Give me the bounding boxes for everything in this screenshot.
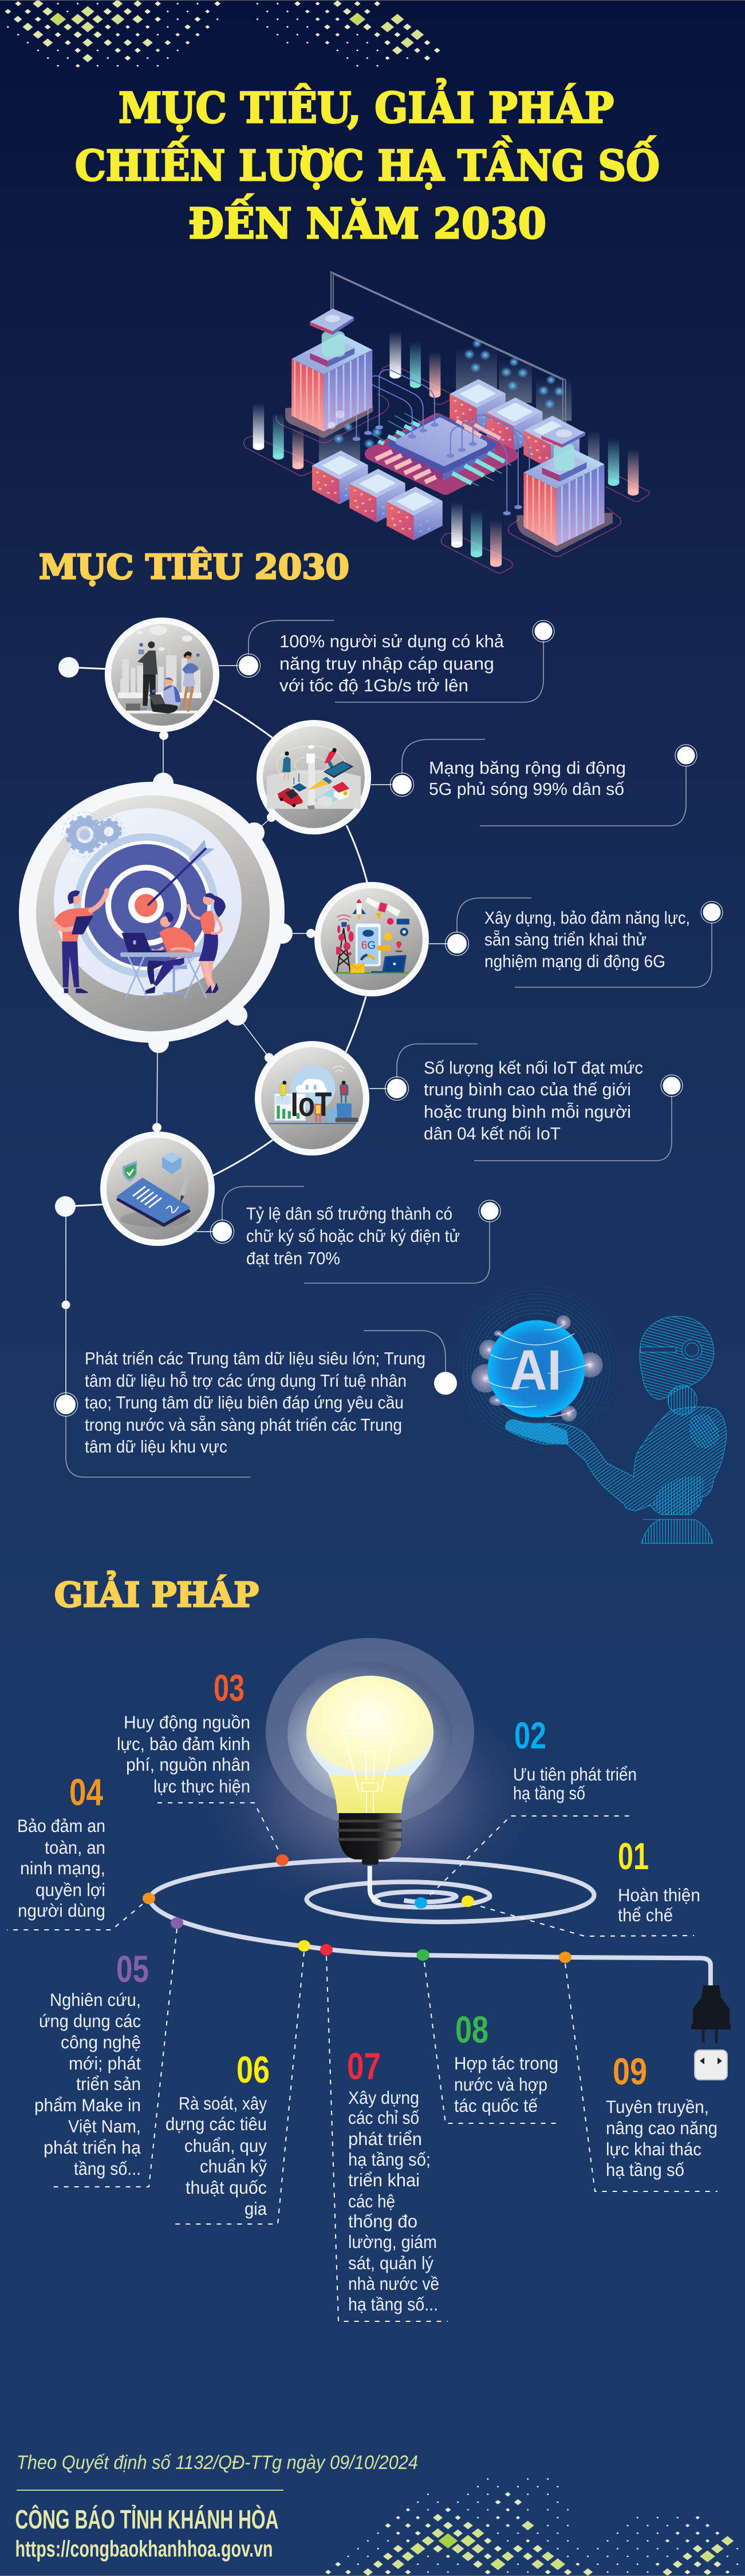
- small connector dots: [62, 731, 316, 1309]
- solution 05: 05: [116, 1948, 149, 1990]
- inner disc: [111, 624, 213, 726]
- text: dân 04 kết nối IoT: [424, 1123, 561, 1143]
- title: [75, 78, 660, 248]
- base plate outlines: [244, 365, 649, 573]
- solution dashed leaders: [7, 1803, 718, 2321]
- solution 08: nước và hợp: [454, 2074, 547, 2095]
- left cubes: [312, 450, 443, 540]
- solution 08: 08: [455, 2008, 488, 2051]
- standing woman: [188, 893, 226, 993]
- network connector lines: [65, 666, 447, 1396]
- circle 3: 6G: [314, 882, 429, 996]
- scene: [269, 1066, 358, 1123]
- text: đạt trên 70%: [246, 1248, 340, 1268]
- node left: [446, 932, 468, 956]
- callout 5: [211, 1186, 500, 1283]
- solution 05: ứng dụng các: [39, 2011, 141, 2031]
- circle 5: digital signature: [100, 1131, 215, 1246]
- solution 07: nhà nước về: [348, 2273, 439, 2294]
- socket: [338, 1813, 402, 1865]
- light beams: [253, 331, 638, 567]
- footer rule: [17, 2490, 283, 2491]
- glow puffs: [471, 1315, 603, 1422]
- glow: [198, 1638, 542, 1917]
- solution 04: người dùng: [18, 1900, 105, 1921]
- team figures: [54, 888, 226, 998]
- solution 09: nâng cao năng: [606, 2118, 718, 2138]
- outer white disc with knobs: [19, 773, 293, 1053]
- heading: mục tiêu 2030: MỤC TIÊU 2030: [39, 547, 349, 587]
- solution 07: hạ tầng số;: [348, 2149, 431, 2170]
- arrow: [148, 840, 215, 905]
- solution 05: tầng số...: [74, 2158, 141, 2179]
- solution 07: phát triển: [348, 2128, 422, 2149]
- title: CHIẾN LƯỢC HẠ TẦNG SỐ: [75, 136, 660, 191]
- target rings: [74, 833, 218, 978]
- panel: target illustration: [19, 773, 293, 1053]
- solution 07: hạ tầng số...: [348, 2294, 438, 2314]
- small dot left 2: [55, 1196, 76, 1217]
- text: [279, 631, 504, 695]
- text: Xây dựng, bảo đảm năng lực,: [484, 908, 690, 928]
- solution 09: Tuyên truyền,: [606, 2096, 709, 2117]
- node left: [54, 1393, 78, 1416]
- solution 05: Việt Nam,: [68, 2116, 141, 2136]
- solution 07: thống đo: [348, 2211, 417, 2231]
- solution 05: [34, 1948, 149, 2179]
- text: trong nước và sẵn sàng phát triển các Trung: [85, 1415, 402, 1435]
- text: [424, 1058, 643, 1143]
- solution 06: 06: [236, 2048, 270, 2091]
- text: Mạng băng rộng di động: [429, 758, 626, 778]
- bracket: [249, 620, 543, 702]
- text: [484, 908, 690, 971]
- text: Số lượng kết nối IoT đạt mức: [424, 1058, 643, 1078]
- connecting overhead wire: [331, 272, 566, 429]
- circle 4: IoT: [255, 1041, 369, 1156]
- solution 07: các hệ: [348, 2191, 395, 2211]
- frame: [105, 618, 219, 732]
- text: [85, 1348, 425, 1457]
- solution 05: mới; phát: [69, 2053, 141, 2074]
- seated man and table: [120, 912, 208, 998]
- solution 07: triển khai: [348, 2170, 420, 2190]
- text: sẵn sàng triển khai thử: [484, 929, 647, 949]
- top platform: [310, 308, 354, 335]
- cable markers: [143, 1854, 571, 1963]
- solution 08: [454, 2008, 558, 2116]
- node right: [701, 901, 723, 923]
- text: trung bình cao của thế giới: [424, 1079, 631, 1099]
- bracket: [402, 739, 686, 826]
- solution 01: 01: [618, 1835, 649, 1877]
- bracket: [397, 1044, 672, 1161]
- callout 1: [237, 620, 554, 702]
- text: nghiệm mạng di động 6G: [484, 951, 665, 971]
- inner disc: [321, 888, 423, 990]
- heading: giải pháp: GIẢI PHÁP: [54, 1570, 259, 1615]
- callout 4: [385, 1044, 683, 1161]
- solution 05: triển sản: [76, 2074, 141, 2094]
- node left: [237, 654, 260, 678]
- solution 03: 03: [214, 1667, 245, 1709]
- callout 3: [446, 898, 723, 987]
- source note: Theo Quyết định số 1132/QĐ-TTg ngày 09/10/2024: [17, 2452, 418, 2474]
- frame: [100, 1131, 215, 1246]
- cable spiral: [149, 1859, 711, 1985]
- solution 08: tác quốc tế: [454, 2095, 538, 2116]
- solution 02: Ưu tiên phát triển: [513, 1764, 637, 1784]
- plug: [691, 1985, 731, 2043]
- circle 1: users and fibre: [105, 618, 219, 732]
- solution 05: phát triển hạ: [44, 2137, 141, 2158]
- right cubes: [450, 379, 580, 469]
- node right: [533, 620, 554, 642]
- central chip: [369, 413, 511, 488]
- globe: [488, 1320, 590, 1418]
- text: với tốc độ 1Gb/s trở lên: [279, 675, 468, 695]
- left tall building: [285, 331, 373, 438]
- filament: [344, 1733, 395, 1813]
- text: hoặc trung bình mỗi người: [424, 1102, 631, 1122]
- node right: [661, 1075, 683, 1097]
- standing man: [54, 888, 109, 993]
- solution 05: Nghiên cứu,: [50, 1989, 141, 2010]
- solution 07: sát, quản lý: [348, 2253, 433, 2273]
- text: tâm dữ liệu hỗ trợ các ứng dụng Trí tuệ nhân: [85, 1371, 407, 1391]
- scene: [267, 745, 361, 810]
- scene: 6G: [361, 940, 376, 952]
- text: [246, 1204, 460, 1268]
- text: [429, 758, 626, 799]
- robot body: [506, 1316, 726, 1544]
- illustration: light bulb and cable: [149, 1638, 731, 2080]
- callout 2: [391, 739, 697, 826]
- solution 06: chuẩn kỹ: [200, 2156, 267, 2177]
- text: năng truy nhập cáp quang: [279, 654, 494, 674]
- solution 01: Hoàn thiện: [618, 1885, 700, 1905]
- solution 07: Xây dựng: [348, 2087, 419, 2108]
- title: MỤC TIÊU, GIẢI PHÁP: [119, 78, 614, 133]
- scene: [334, 897, 409, 974]
- bracket: [457, 898, 712, 987]
- node left: [391, 773, 413, 797]
- small dot left: [58, 657, 79, 678]
- solution 05: phẩm Make in: [34, 2095, 141, 2115]
- solution 03: Huy động nguồn: [124, 1712, 250, 1732]
- solution 06: [165, 2048, 270, 2219]
- frame: [255, 1041, 369, 1156]
- text: Tỷ lệ dân số trưởng thành có: [246, 1204, 452, 1224]
- bulb glass: [306, 1676, 433, 1775]
- gears: [62, 812, 124, 857]
- text: 100% người sử dụng có khả: [279, 631, 504, 651]
- solution 02: 02: [514, 1714, 546, 1756]
- bracket: [66, 1331, 446, 1477]
- solution 09: hạ tầng số: [606, 2159, 684, 2180]
- solution 07: [347, 2045, 439, 2314]
- publisher url: https://congbaokhanhhoa.gov.vn: [15, 2537, 273, 2562]
- illustration: isometric digital infrastructure: [244, 272, 649, 573]
- scene: [118, 1152, 192, 1227]
- arched wires: [357, 370, 529, 513]
- solution 04: 04: [69, 1771, 103, 1813]
- solution 04: quyền lợi: [36, 1879, 105, 1900]
- text: Phát triển các Trung tâm dữ liệu siêu lớn; Trung: [85, 1348, 425, 1368]
- solution 06: dựng các tiêu: [165, 2114, 267, 2134]
- decorative diamonds bottom: [328, 2479, 738, 2572]
- solution 06: Rà soát, xây: [179, 2093, 267, 2114]
- publisher name: CÔNG BÁO TỈNH KHÁNH HÒA: [15, 2504, 278, 2534]
- text: tâm dữ liệu khu vực: [85, 1437, 227, 1457]
- solution 03: phí, nguồn nhân: [126, 1754, 250, 1775]
- text: chữ ký số hoặc chữ ký điện tử: [246, 1226, 460, 1246]
- solution 02: hạ tầng số: [513, 1783, 585, 1803]
- inner disc: [263, 726, 365, 828]
- frame: [257, 720, 371, 834]
- node right: [434, 1372, 457, 1395]
- scene: [118, 626, 202, 714]
- right platform: [541, 425, 585, 448]
- solution 09: lực khai thác: [606, 2139, 701, 2159]
- node right: [479, 1200, 500, 1222]
- solution 04: toàn, an: [45, 1837, 105, 1858]
- AI label: AI: [510, 1338, 562, 1402]
- bulb neck: [325, 1766, 415, 1813]
- inner disc: [107, 1138, 208, 1240]
- socket outlet: [695, 2050, 727, 2080]
- inner disc: [261, 1047, 363, 1149]
- grey ring: [36, 796, 270, 1031]
- solution 07: 07: [347, 2045, 381, 2087]
- callout 6: [54, 1331, 457, 1477]
- solution 03: lực thực hiện: [153, 1776, 250, 1797]
- circle 2: 5G: [257, 720, 371, 834]
- solution 09: [606, 2050, 718, 2180]
- solution 06: gia: [245, 2198, 267, 2219]
- solution 03: [117, 1667, 250, 1797]
- solution 06: thuật quốc: [186, 2177, 267, 2198]
- solution 03: lực, bảo đảm kinh: [117, 1734, 250, 1754]
- solution 04: [17, 1771, 105, 1921]
- node right: [675, 745, 697, 766]
- frame: [314, 882, 429, 996]
- inner light disc: [54, 808, 242, 996]
- node left: [211, 1220, 234, 1243]
- solution 01: thể chế: [618, 1905, 673, 1925]
- bracket: [222, 1186, 490, 1283]
- solution 08: Hợp tác trong: [454, 2053, 558, 2074]
- wire contacts: [353, 423, 522, 515]
- title: ĐẾN NĂM 2030: [188, 194, 546, 248]
- illustration: AI robot: [455, 1287, 726, 1544]
- solution 05: công nghệ: [61, 2032, 141, 2052]
- solution 01: [618, 1835, 700, 1925]
- solution 04: Bảo đảm an: [17, 1815, 105, 1836]
- solution 06: chuẩn, quy: [184, 2135, 267, 2156]
- translucent light columns: [319, 339, 571, 462]
- solution 07: lường, giám: [348, 2231, 437, 2252]
- halo dots: [455, 1287, 617, 1449]
- decorative diamonds top: [8, 3, 437, 66]
- solution 02: [513, 1714, 637, 1803]
- node left: [385, 1077, 409, 1100]
- solution 07: các chỉ số: [348, 2107, 419, 2128]
- solution 04: ninh mạng,: [20, 1858, 105, 1878]
- text: 5G phủ sóng 99% dân số: [429, 779, 624, 799]
- right tall building: [517, 444, 613, 552]
- text: tạo; Trung tâm dữ liệu biên đáp ứng yêu cầu: [85, 1392, 404, 1412]
- solution 09: 09: [613, 2050, 647, 2092]
- IoT label: IoT: [290, 1085, 332, 1123]
